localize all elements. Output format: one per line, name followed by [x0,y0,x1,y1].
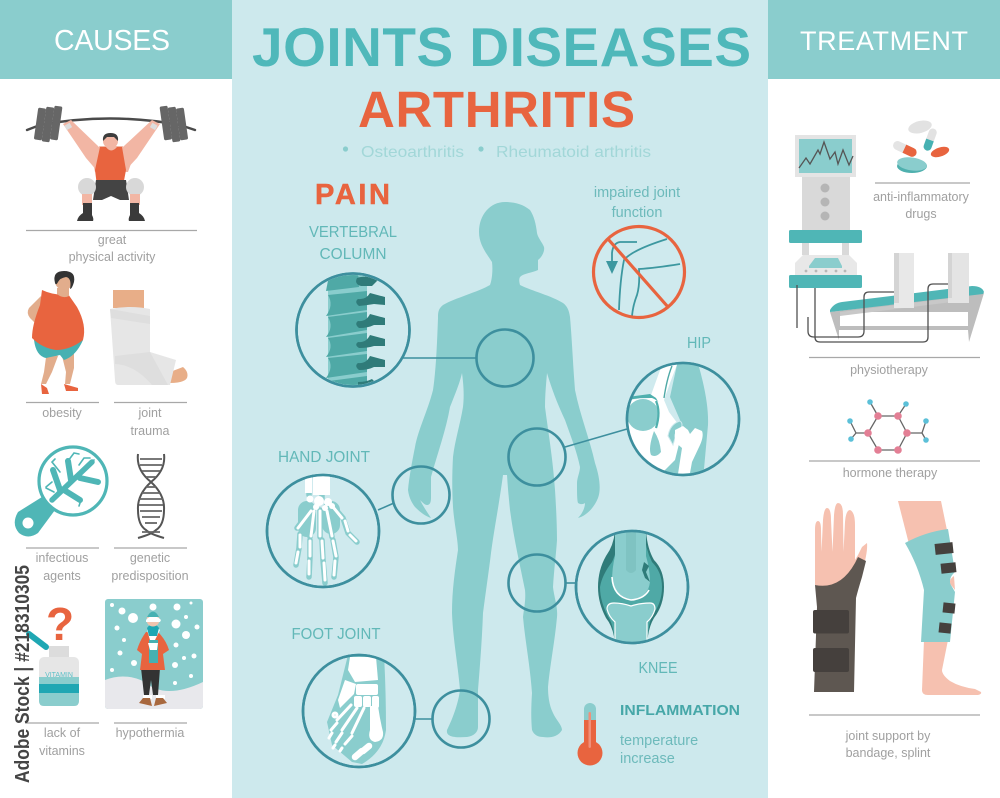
label: vertebral column: VERTEBRAL [309,224,397,241]
label: vertebral column: COLUMN [320,246,386,263]
label: temperature increase: temperature [620,733,698,749]
caption: trauma [131,424,169,438]
icon: knee brace [898,501,981,695]
label: temperature increase: increase [620,751,675,767]
connector: hand [378,503,394,510]
caption: great [98,233,127,247]
label: pain: PAIN [315,179,390,211]
marker: torso [476,330,534,386]
label: hip: HIP [687,335,711,352]
icon: vitamin bottle: ? [46,598,74,650]
icon: leg cast [110,290,188,385]
caption: hormone therapy [843,466,938,480]
label: foot joint: FOOT JOINT [292,626,381,643]
arthritis types: Rheumatoid arthritis [496,144,651,161]
cause: hypothermia [105,599,203,740]
detail: hand circle [267,470,379,587]
label: knee: KNEE [638,660,678,677]
caption: vitamins [39,744,85,758]
icon: impaired joint prohibition [594,226,684,318]
caption: obesity [42,406,83,420]
stock id label: Adobe Stock | #218310305 [12,565,34,783]
cause: joint trauma [110,290,188,438]
cause: genetic predisposition [111,454,189,583]
arthritis types: Osteoarthritis [361,144,464,161]
subtitle: arthritis: ARTHRITIS [358,81,635,138]
connector: hip [565,429,627,447]
icon: person in snow [105,599,203,709]
detail: knee circle [576,530,688,645]
caption [36,551,88,583]
caption: infectious [36,551,88,565]
marker: knee [508,554,566,612]
treatment: joint support by bandage, splint [809,501,981,760]
icon: wrist splint [813,503,867,692]
detail: foot circle [303,655,415,767]
caption [873,190,970,221]
label: vertebral column [309,224,397,263]
caption [131,406,169,438]
panel: treatment header [768,0,1000,79]
panel: causes header: CAUSES [54,25,170,57]
label: impaired joint function: impaired joint [594,185,680,201]
arthritis types [343,144,651,161]
icon: dna helix [138,454,164,538]
treatment: anti-inflammatory drugs [873,118,970,221]
caption [111,551,189,583]
cause: lack of vitamins [26,598,99,758]
caption: joint [138,406,162,420]
caption: physical activity [69,250,156,264]
icon: vitamin bottle [29,598,79,706]
icon: vitamin bottle: VITAMIN [45,672,73,679]
cause: great physical activity [26,106,197,264]
cause: infectious agents [15,447,107,583]
connector: foot [415,718,433,720]
caption: physiotherapy [850,363,929,377]
caption: agents [43,569,81,583]
caption: predisposition [111,569,189,583]
caption: bandage, splint [846,746,931,760]
label: temperature increase [620,733,698,767]
label: inflammation: INFLAMMATION [620,702,740,719]
panel: causes header [0,0,232,79]
detail: hip circle [626,360,739,480]
detail: spine circle [296,270,410,400]
icon: molecule [847,399,929,454]
caption: hypothermia [116,726,184,740]
icon: pills [892,118,950,173]
label: impaired joint function: function [612,205,662,221]
icon: down arrow [606,261,618,274]
connector: knee [565,582,576,584]
caption [845,729,931,760]
icon: thermometer [578,703,602,766]
icon: weightlifter [27,106,195,221]
icon: physiotherapy machine [789,135,984,342]
icon: obese woman [28,271,84,394]
marker: foot [432,690,490,748]
icon: magnifier with bacteria [15,447,107,536]
title: JOINTS DISEASES [252,16,751,78]
label: impaired joint function [594,185,680,221]
caption [39,726,85,758]
cause: obesity [26,271,99,420]
central panel background [232,0,768,798]
body silhouette [408,202,600,737]
connector: spine [402,357,477,359]
marker: hand [392,466,450,524]
caption: joint support by [845,729,931,743]
marker: hip [508,428,566,486]
caption: drugs [905,207,937,221]
caption: genetic [130,551,170,565]
caption [69,233,156,264]
caption: anti-inflammatory [873,190,970,204]
caption: lack of [44,726,81,740]
treatment: physiotherapy [789,135,984,377]
treatment: hormone therapy [809,399,980,480]
label: hand joint: HAND JOINT [278,449,370,466]
panel: treatment header: TREATMENT [800,26,968,56]
